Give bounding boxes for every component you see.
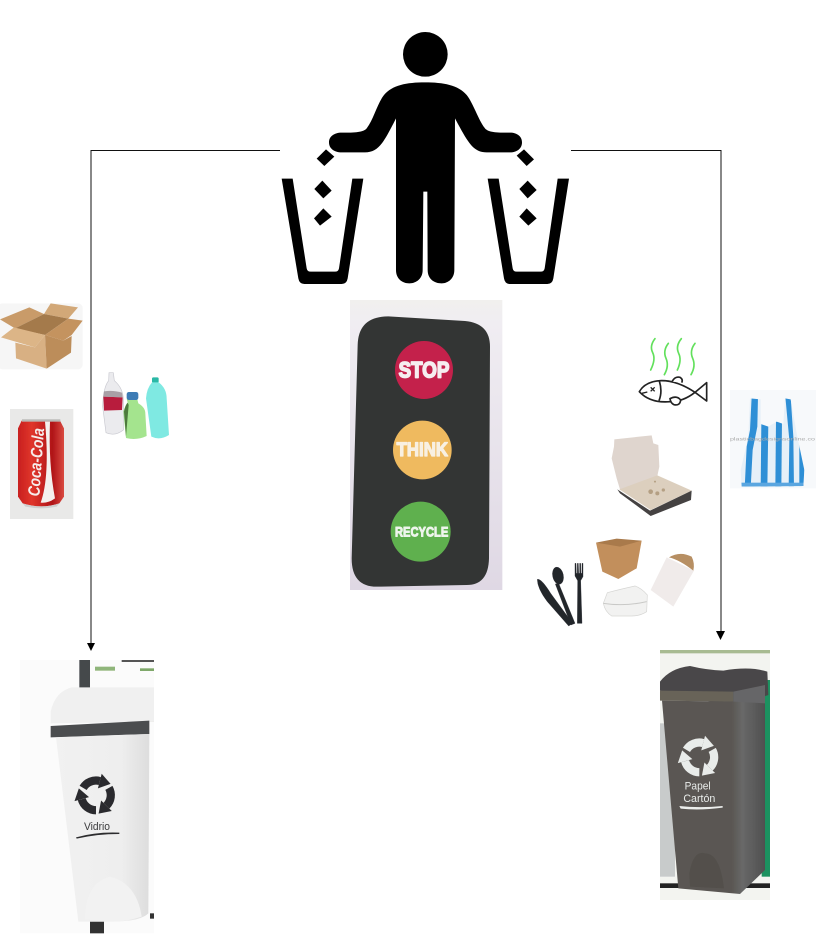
recycling symbol bbox=[673, 736, 724, 781]
stink waves bbox=[651, 339, 695, 375]
stop light bbox=[395, 341, 453, 399]
bin label: Cartón bbox=[683, 793, 715, 805]
bin label: Papel bbox=[685, 780, 711, 792]
photo: white glass bin (Vidrio): Vidrio bbox=[84, 821, 110, 833]
photo: open pizza box bbox=[612, 435, 692, 516]
photo: soda can bbox=[10, 409, 73, 519]
wrapped food bag bbox=[651, 557, 694, 607]
photo: grey paper and cardboard bin (Papel Cartón) bbox=[660, 650, 770, 900]
recycling symbol bbox=[70, 774, 121, 819]
connector arrow: left, to glass bin bbox=[87, 150, 280, 651]
recycle light bbox=[391, 502, 451, 562]
icon: person dropping litter into two bins bbox=[282, 32, 569, 284]
photo: disposable food packaging and cutlery bbox=[537, 539, 694, 626]
foam clamshell bbox=[603, 586, 647, 616]
recycle light: RECYCLE bbox=[395, 524, 448, 540]
photo: plastic bottles bbox=[103, 373, 169, 439]
noodle box bbox=[596, 541, 642, 579]
stop light: STOP bbox=[399, 357, 449, 382]
photo: white glass bin (Vidrio) bbox=[20, 660, 154, 933]
bin label bbox=[683, 780, 715, 805]
photo: cardboard box bbox=[0, 303, 83, 369]
think light bbox=[393, 421, 452, 479]
icon: stinking fish bbox=[639, 339, 707, 405]
think light: THINK bbox=[397, 440, 448, 461]
photo: striped plastic bag: plasticbagdesignsonline.co bbox=[730, 437, 815, 443]
plastic cutlery bbox=[537, 563, 583, 626]
connector arrow: right, to paper bin bbox=[571, 150, 725, 640]
traffic light: stop think recycle bbox=[350, 300, 502, 590]
photo: soda can: Coca-Cola bbox=[24, 427, 48, 497]
photo: striped plastic bag bbox=[730, 398, 815, 487]
